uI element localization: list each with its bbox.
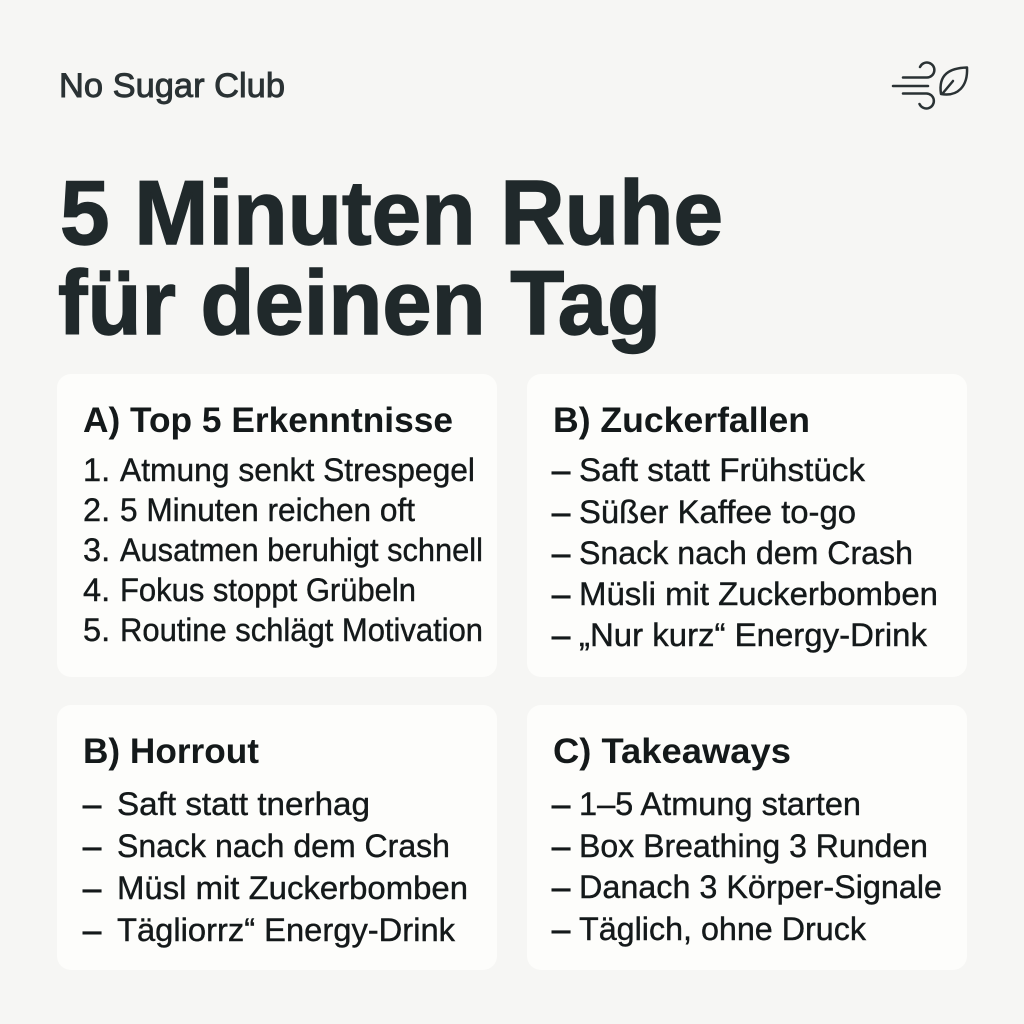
dash list: Müsl mit Zuckerbomben [117,870,468,906]
dash list: – [552,869,571,905]
numbered list: 5 Minuten reichen oft [120,492,415,528]
dash list: – [552,576,571,612]
icon: wind and leaf [893,63,967,108]
dash list [552,452,938,653]
dash list [83,786,468,948]
dash list: „Nur kurz“ Energy-Drink [579,617,928,653]
heading: Top 5 Erkenntnisse: A) Top 5 Erkenntnisse [83,401,453,440]
dash list: Snack nach dem Crash [117,828,450,864]
dash list: – [552,617,571,653]
panel: A) Top 5 Erkenntnisse [57,374,497,677]
dash list: – [552,828,571,864]
dash list: Saft statt tnerhag [117,786,370,822]
dash list: Snack nach dem Crash [579,535,913,571]
heading: Horrout: B) Horrout [83,732,259,771]
dash list: Danach 3 Körper-Signale [579,869,942,905]
dash list: – [552,911,571,947]
dash list: – [83,912,102,948]
dash list: Süßer Kaffee to-go [579,494,856,530]
dash list: – [83,786,102,822]
numbered list: Ausatmen beruhigt schnell [120,532,483,568]
brand name: No Sugar Club [59,67,285,105]
dash list: – [552,535,571,571]
title: für deinen Tag [58,253,661,354]
numbered list: 1. [83,452,110,488]
panel: C) Takeaways [527,705,967,970]
dash list: – [83,870,102,906]
heading: Takeaways: C) Takeaways [553,732,791,771]
panel: B) Horrout [57,705,497,970]
dash list [552,786,942,947]
dash list: – [552,786,571,822]
numbered list: 3. [83,532,110,568]
numbered list: Atmung senkt Strespegel [120,452,475,488]
dash list: – [83,828,102,864]
dash list: Tägliorrz“ Energy-Drink [117,912,456,948]
numbered list: 4. [83,572,110,608]
numbered list: Fokus stoppt Grübeln [120,572,416,608]
dash list: Täglich, ohne Druck [579,911,867,947]
dash list: Box Breathing 3 Runden [579,828,928,864]
title [58,163,723,354]
numbered list: Routine schlägt Motivation [120,612,483,648]
numbered list: 5. [83,612,110,648]
panel: B) Zuckerfallen [527,374,967,677]
numbered list [83,452,483,648]
dash list: Müsli mit Zuckerbomben [579,576,938,612]
numbered list: 2. [83,492,110,528]
dash list: – [552,494,571,530]
title: 5 Minuten Ruhe [60,163,723,264]
dash list: Saft statt Frühstück [579,452,866,488]
dash list: – [552,452,571,488]
heading: Zuckerfallen: B) Zuckerfallen [553,401,810,440]
dash list: 1–5 Atmung starten [579,786,861,822]
